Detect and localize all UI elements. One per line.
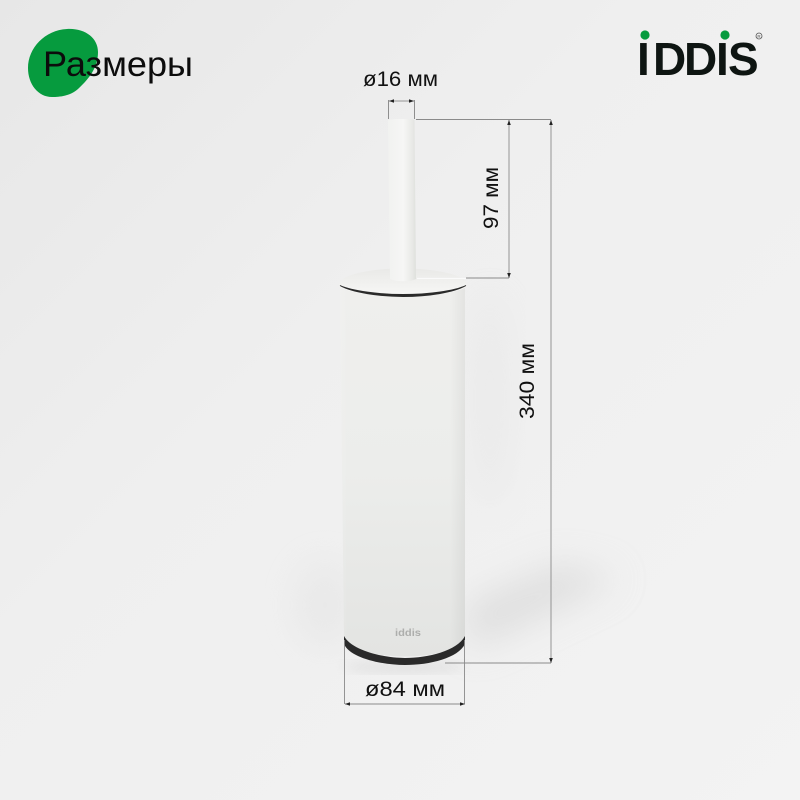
logo: IDDIS: R: [757, 34, 761, 39]
dimension: handle height 97 mm: [416, 120, 551, 278]
dimension: total height 340 mm: [445, 120, 553, 663]
handle: [388, 119, 416, 281]
floor shadow: [295, 290, 620, 672]
title: Размеры: [43, 45, 193, 84]
lid black seam: [340, 286, 466, 296]
green blob: [28, 29, 98, 97]
dimension: handle height 97 mm: 97 мм: [479, 167, 503, 229]
dimension: total height 340 mm: 340 мм: [515, 343, 539, 419]
dimension: handle diameter 16 mm: [363, 67, 438, 119]
product: toilet brush holder: [339, 119, 467, 665]
small body logo: iddis: [395, 627, 421, 639]
lid: [339, 268, 467, 296]
dimension: base diameter 84 mm: [344, 640, 465, 706]
container body: [340, 288, 465, 656]
dimension: handle diameter 16 mm: ø16 мм: [363, 67, 438, 91]
dimension: base diameter 84 mm: ø84 мм: [365, 677, 445, 701]
black base ring: [344, 636, 465, 665]
logo: IDDIS: IDDIS: [637, 33, 759, 85]
